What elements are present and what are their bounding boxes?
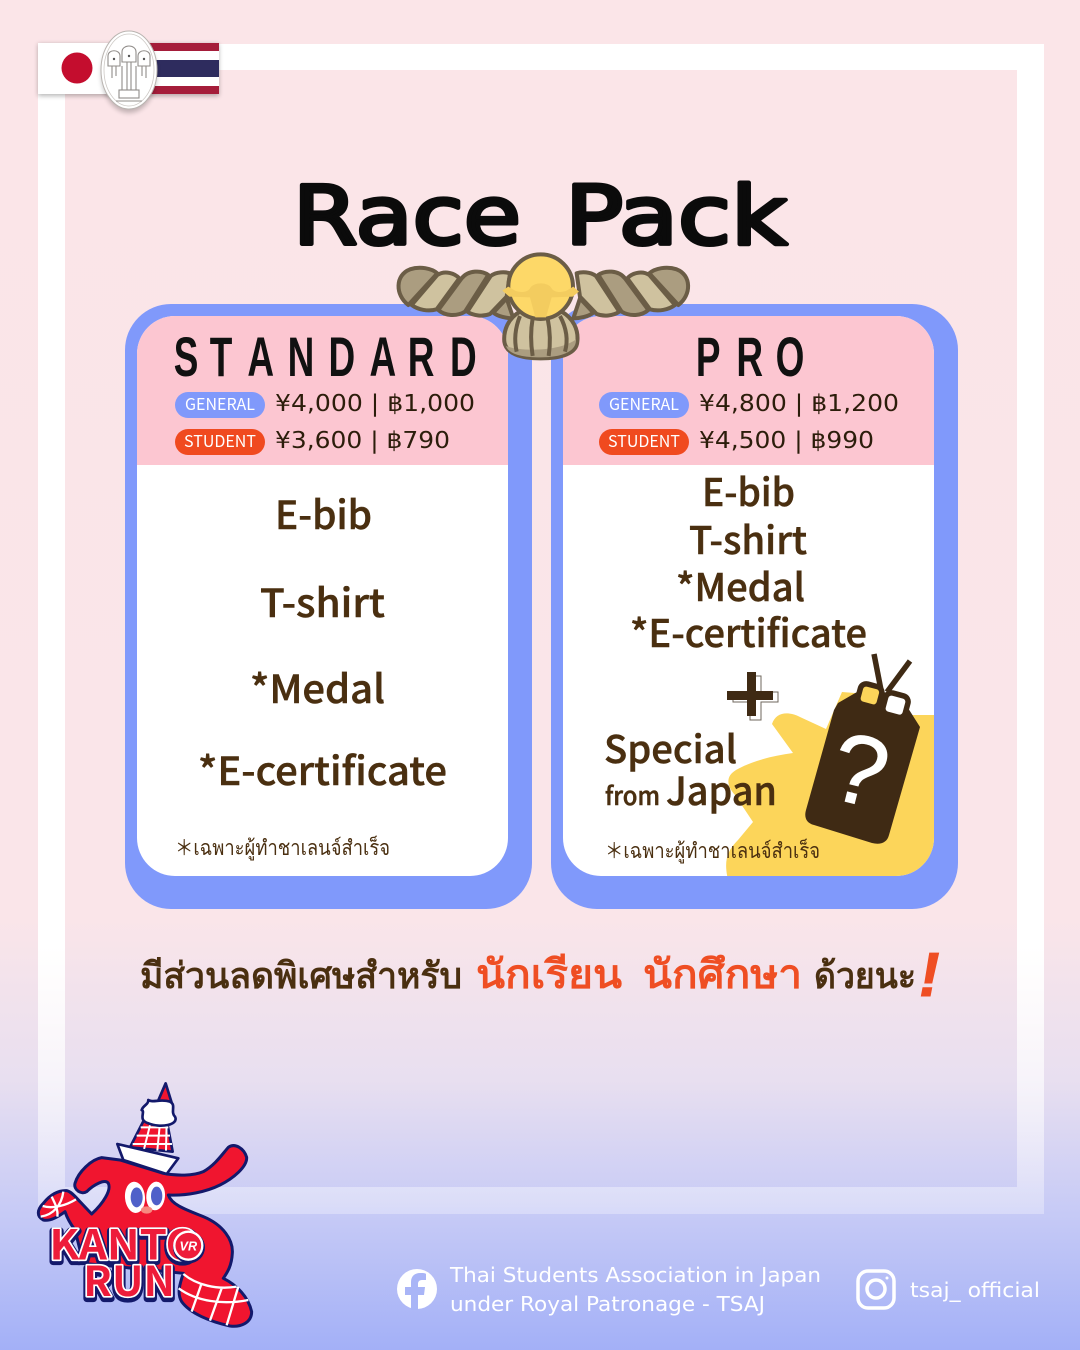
- icon: omamori charm: [805, 654, 920, 844]
- list item: Medal: *Medal: [676, 557, 805, 612]
- tower: [117, 1083, 178, 1174]
- text: handle: tsaj_ official: [910, 1278, 1040, 1302]
- flag: Japan: [38, 43, 118, 94]
- text: too: ด้วยนะ: [814, 947, 916, 999]
- pill: general: GENERAL: [609, 391, 679, 415]
- price: general: ¥4,800 | ฿1,200: [699, 391, 899, 417]
- title: [293, 170, 787, 264]
- price: student: ¥3,600 | ฿790: [275, 428, 450, 454]
- footer: Instagram: [858, 1271, 1040, 1308]
- text: Special: Special: [604, 719, 737, 774]
- list item: E-bib: E-bib: [275, 485, 372, 541]
- text: KANTO RUN: [49, 1211, 199, 1310]
- list item: T-shirt: T-shirt: [260, 573, 385, 629]
- pill: student: STUDENT: [184, 428, 256, 452]
- list item: E-bib: E-bib: [702, 462, 795, 517]
- text: association name: Thai Students Association in Japan: [449, 1263, 821, 1287]
- exclamation mark: !: [919, 941, 940, 1010]
- yellow blob: [726, 692, 940, 880]
- icon: facebook: [397, 1269, 437, 1310]
- badge: VR: [173, 1231, 205, 1263]
- footnote: ＊เฉพาะผู้ทำชาเลนจ์สำเร็จ: [175, 832, 390, 862]
- rope: left: [399, 268, 513, 318]
- text: Japan: Japan: [666, 761, 777, 817]
- title word: Pack: Pack: [565, 170, 787, 264]
- icon: plus: [727, 672, 778, 720]
- pill: general: GENERAL: [185, 391, 255, 415]
- text: KANTO RUN: KANTO: [49, 1214, 199, 1274]
- pill: student: STUDENT: [608, 428, 680, 452]
- panel: pro: [551, 304, 958, 909]
- list item: Medal: *Medal: [250, 659, 385, 715]
- price: student: ¥4,500 | ฿990: [699, 428, 874, 454]
- list item: T-shirt: T-shirt: [689, 510, 807, 565]
- seal: three-headed elephant: [101, 31, 157, 113]
- mascot: Kanto VR Run: [38, 1083, 252, 1326]
- hand grid: [41, 1192, 76, 1217]
- footer: Facebook: [397, 1263, 821, 1316]
- text: KANTO RUN: RUN: [83, 1248, 175, 1308]
- list item: E-certificate: *E-certificate: [630, 603, 867, 658]
- text: discount: มีส่วนลดพิเศษสำหรับ: [140, 947, 462, 999]
- logo: Japan and Thailand flags with seal: [38, 31, 219, 113]
- tassel: [504, 312, 578, 358]
- text: university students: นักศึกษา: [643, 942, 802, 1000]
- text: KANTO RUN: KANTO: [49, 1211, 199, 1271]
- eyes: [124, 1181, 166, 1214]
- pill: general: [599, 391, 689, 418]
- mascot body: [38, 1146, 252, 1326]
- rope: right: [573, 268, 688, 318]
- flag: Thailand: [140, 43, 219, 94]
- question mark: ?: [820, 710, 899, 830]
- badge: VR: VR: [180, 1239, 198, 1253]
- discount message: [140, 941, 940, 1010]
- price: general: ¥4,000 | ฿1,000: [275, 391, 475, 417]
- heading: STANDARD: STANDARD: [174, 326, 477, 389]
- text: from: from: [605, 777, 660, 813]
- foot grid: [179, 1274, 248, 1325]
- heading: PRO: PRO: [696, 326, 804, 389]
- panel: standard: [125, 304, 532, 909]
- bell: [502, 254, 579, 319]
- text: association name line 2: under Royal Patronage - TSAJ: [450, 1292, 765, 1316]
- list item: E-certificate: *E-certificate: [198, 741, 447, 797]
- text: KANTO RUN: RUN: [83, 1250, 175, 1310]
- pill: general: [175, 391, 265, 418]
- icon: rope and bell: [399, 254, 688, 358]
- title word: Race: Race: [293, 170, 521, 264]
- icon: instagram: [858, 1271, 894, 1308]
- text: school students: นักเรียน: [476, 942, 622, 1000]
- footnote: ＊เฉพาะผู้ทำชาเลนจ์สำเร็จ: [605, 835, 820, 865]
